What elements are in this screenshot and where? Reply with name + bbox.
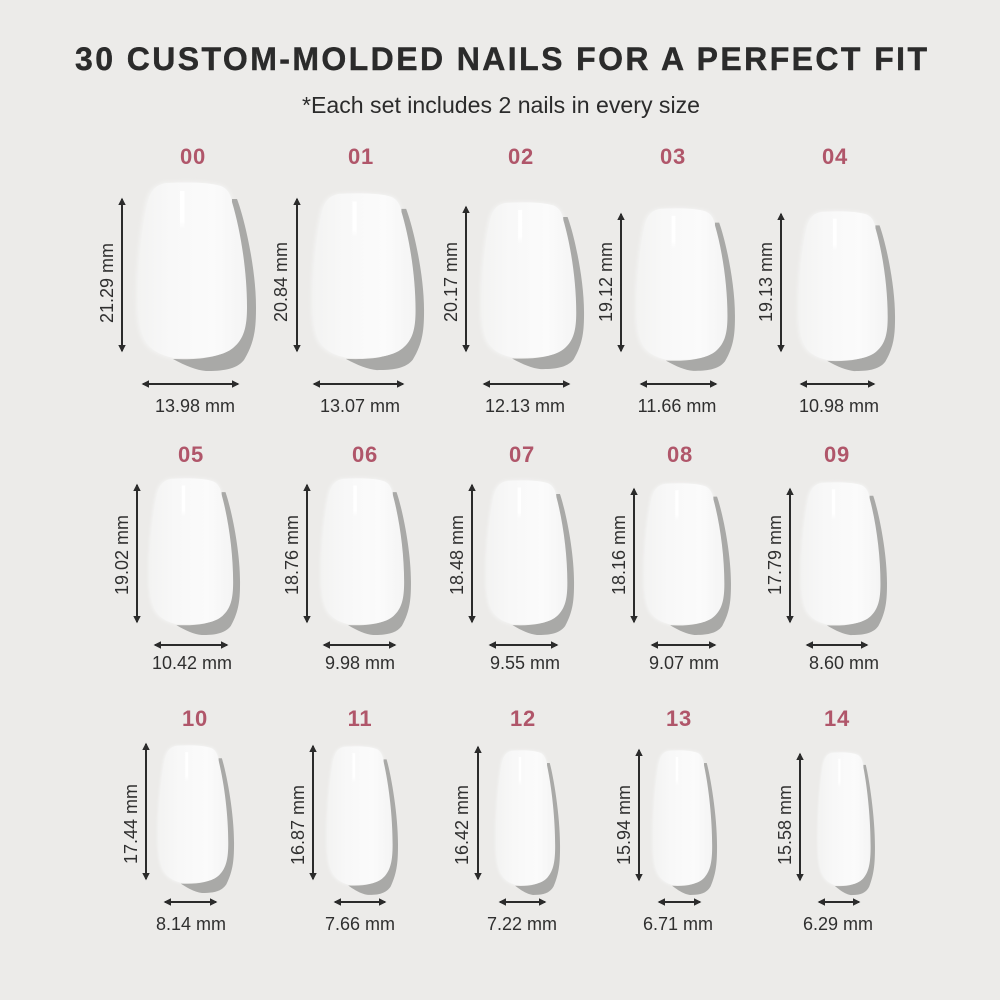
length label: 15.94 mm bbox=[614, 785, 634, 865]
nail bbox=[797, 211, 895, 371]
length arrow bbox=[633, 489, 635, 622]
nail bbox=[495, 750, 560, 895]
size number: 04 bbox=[822, 144, 848, 169]
length arrow bbox=[789, 489, 791, 622]
nail bbox=[652, 750, 717, 895]
size 12 bbox=[452, 706, 560, 934]
length label: 17.79 mm bbox=[765, 515, 785, 595]
size 08 bbox=[609, 442, 731, 673]
size number: 09 bbox=[824, 442, 850, 467]
width arrow bbox=[641, 383, 716, 385]
width arrow bbox=[324, 644, 395, 646]
width arrow bbox=[143, 383, 238, 385]
length arrow bbox=[471, 485, 473, 622]
size 01 bbox=[271, 144, 424, 416]
size number: 01 bbox=[348, 144, 374, 169]
length label: 20.84 mm bbox=[271, 242, 291, 322]
width arrow bbox=[165, 901, 216, 903]
width label: 13.98 mm bbox=[155, 396, 235, 416]
size 13 bbox=[614, 706, 717, 934]
size 06 bbox=[282, 442, 411, 673]
size 11 bbox=[288, 706, 398, 934]
length label: 21.29 mm bbox=[97, 243, 117, 323]
size number: 13 bbox=[666, 706, 692, 731]
length arrow bbox=[638, 750, 640, 880]
width label: 13.07 mm bbox=[320, 396, 400, 416]
length label: 15.58 mm bbox=[775, 785, 795, 865]
size 10 bbox=[121, 706, 234, 934]
length arrow bbox=[465, 207, 467, 351]
length label: 20.17 mm bbox=[441, 242, 461, 322]
nail bbox=[136, 181, 256, 371]
subtitle: *Each set includes 2 nails in every size bbox=[302, 92, 700, 118]
size 05 bbox=[112, 442, 240, 673]
length arrow bbox=[312, 746, 314, 879]
nail bbox=[148, 478, 240, 635]
width arrow bbox=[335, 901, 385, 903]
width label: 6.29 mm bbox=[803, 914, 873, 934]
length arrow bbox=[620, 214, 622, 351]
length label: 18.48 mm bbox=[447, 515, 467, 595]
width arrow bbox=[807, 644, 867, 646]
size 04 bbox=[756, 144, 895, 416]
length label: 16.42 mm bbox=[452, 785, 472, 865]
width label: 6.71 mm bbox=[643, 914, 713, 934]
width arrow bbox=[500, 901, 545, 903]
width arrow bbox=[314, 383, 403, 385]
size number: 00 bbox=[180, 144, 206, 169]
length arrow bbox=[296, 199, 298, 351]
size 02 bbox=[441, 144, 584, 416]
length label: 18.16 mm bbox=[609, 515, 629, 595]
width label: 7.22 mm bbox=[487, 914, 557, 934]
length label: 18.76 mm bbox=[282, 515, 302, 595]
nail bbox=[157, 745, 234, 893]
width arrow bbox=[819, 901, 859, 903]
size 00 bbox=[97, 144, 256, 416]
size number: 06 bbox=[352, 442, 378, 467]
title: 30 CUSTOM-MOLDED NAILS FOR A PERFECT FIT bbox=[75, 41, 927, 77]
width arrow bbox=[155, 644, 227, 646]
length arrow bbox=[780, 214, 782, 351]
length arrow bbox=[145, 744, 147, 879]
length arrow bbox=[306, 485, 308, 622]
size number: 10 bbox=[182, 706, 208, 731]
width arrow bbox=[490, 644, 557, 646]
width arrow bbox=[659, 901, 700, 903]
nail bbox=[311, 192, 424, 370]
nail bbox=[480, 202, 584, 369]
length label: 19.12 mm bbox=[596, 242, 616, 322]
nail bbox=[643, 483, 731, 635]
width label: 10.42 mm bbox=[152, 653, 232, 673]
width label: 8.14 mm bbox=[156, 914, 226, 934]
size number: 11 bbox=[348, 706, 372, 731]
width label: 8.60 mm bbox=[809, 653, 879, 673]
nail bbox=[817, 752, 875, 895]
width label: 10.98 mm bbox=[799, 396, 879, 416]
width label: 12.13 mm bbox=[485, 396, 565, 416]
nail bbox=[326, 746, 398, 895]
length label: 19.02 mm bbox=[112, 515, 132, 595]
size number: 05 bbox=[178, 442, 204, 467]
size 07 bbox=[447, 442, 574, 673]
nail bbox=[485, 480, 574, 635]
width label: 7.66 mm bbox=[325, 914, 395, 934]
width label: 9.55 mm bbox=[490, 653, 560, 673]
width arrow bbox=[801, 383, 874, 385]
width arrow bbox=[484, 383, 569, 385]
width label: 11.66 mm bbox=[638, 396, 716, 416]
length arrow bbox=[799, 754, 801, 880]
length label: 19.13 mm bbox=[756, 242, 776, 322]
size 09 bbox=[765, 442, 887, 673]
size number: 14 bbox=[824, 706, 850, 731]
size number: 12 bbox=[510, 706, 536, 731]
length arrow bbox=[121, 199, 123, 351]
width label: 9.98 mm bbox=[325, 653, 395, 673]
nail bbox=[320, 478, 411, 635]
size 14 bbox=[775, 706, 875, 934]
size number: 03 bbox=[660, 144, 686, 169]
width arrow bbox=[652, 644, 715, 646]
size number: 07 bbox=[509, 442, 535, 467]
length arrow bbox=[477, 747, 479, 879]
nail bbox=[800, 482, 887, 635]
nail bbox=[635, 208, 735, 371]
width label: 9.07 mm bbox=[649, 653, 719, 673]
size number: 02 bbox=[508, 144, 534, 169]
size number: 08 bbox=[667, 442, 693, 467]
length label: 17.44 mm bbox=[121, 784, 141, 864]
length label: 16.87 mm bbox=[288, 785, 308, 865]
length arrow bbox=[136, 485, 138, 622]
size 03 bbox=[596, 144, 735, 416]
